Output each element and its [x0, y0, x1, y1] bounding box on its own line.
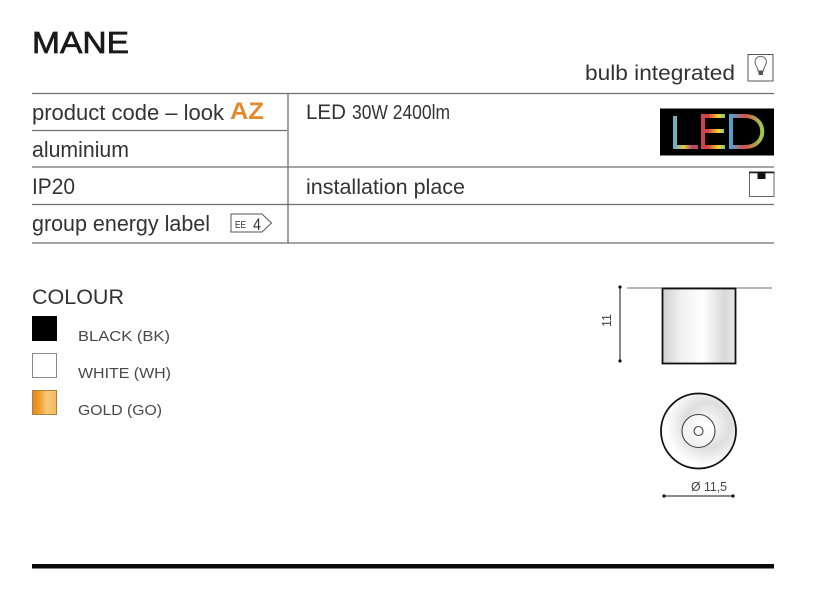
icon: energy label arrow: [231, 214, 272, 234]
icon: LED badge: [660, 108, 774, 156]
icon: energy label arrow: EE: [235, 220, 246, 231]
colour swatch: white: [32, 354, 171, 382]
icon: energy label arrow: 4: [253, 215, 261, 234]
colour swatch: black: BLACK (BK): [78, 329, 170, 345]
protection rating: IP20: [32, 174, 75, 199]
icon: installation place: [749, 172, 774, 196]
colour swatch: gold: GOLD (GO): [78, 403, 162, 419]
material: aluminium: [32, 137, 129, 162]
colour swatch: white: WHITE (WH): [78, 366, 171, 382]
height dimension: [599, 285, 622, 363]
light source: [306, 101, 450, 124]
energy label row: group energy label: [32, 211, 210, 236]
bottom rule: [32, 564, 774, 568]
icon: bulb: [748, 54, 773, 81]
height dimension: 11: [599, 314, 614, 327]
side view drawing: [599, 285, 772, 364]
top view drawing: [661, 394, 736, 498]
product code row: product code – look: [32, 100, 225, 125]
colour heading: COLOUR: [32, 286, 124, 309]
title: MANE: [32, 25, 129, 60]
light source: 30W 2400lm: [352, 102, 450, 124]
product code row: AZ: [230, 98, 264, 125]
colour swatch: black: [32, 316, 170, 345]
table rules: [32, 93, 774, 244]
light source: LED: [306, 101, 346, 124]
colour swatch: gold: [32, 390, 162, 419]
installation place label: installation place: [306, 176, 465, 199]
bulb integrated label: bulb integrated: [585, 62, 735, 85]
diameter dimension: Ø 11,5: [691, 479, 727, 494]
